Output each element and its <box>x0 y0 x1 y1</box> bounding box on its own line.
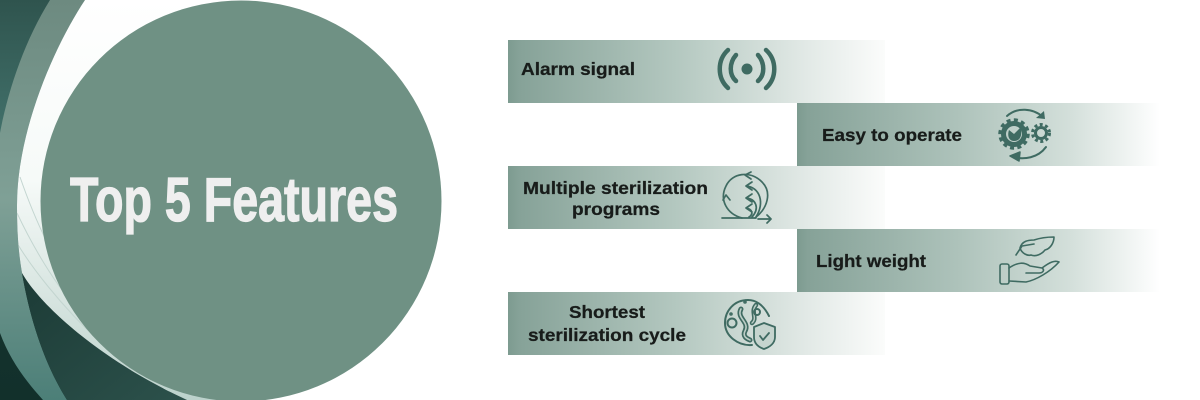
icon: gears with arrows <box>1000 110 1050 161</box>
feature row: shortest sterilization cycle <box>508 292 885 355</box>
feature row: shortest sterilization cycle: Shortest <box>569 302 645 322</box>
icon: alarm signal <box>720 50 774 88</box>
background swoosh decoration <box>0 0 216 400</box>
icon: cycle with arrows <box>722 172 771 223</box>
feature row: multiple sterilization programs: programs <box>572 199 660 219</box>
feature row: light weight <box>797 229 1160 292</box>
feature row: multiple sterilization programs: Multiple sterilization <box>523 178 708 198</box>
feature row: shortest sterilization cycle: sterilization cycle <box>528 325 686 345</box>
feature row: light weight: Light weight <box>816 251 926 271</box>
feature row: multiple sterilization programs <box>508 166 885 229</box>
title: Top 5 Features <box>70 166 398 235</box>
feature row: alarm signal <box>508 40 885 103</box>
feature row: easy to operate <box>797 103 1160 166</box>
feature row: alarm signal: Alarm signal <box>521 59 635 79</box>
feature row: easy to operate: Easy to operate <box>822 125 962 145</box>
icon: hand with leaf <box>1000 237 1059 284</box>
title circle <box>40 0 442 400</box>
icon: microbes and shield <box>725 300 775 349</box>
